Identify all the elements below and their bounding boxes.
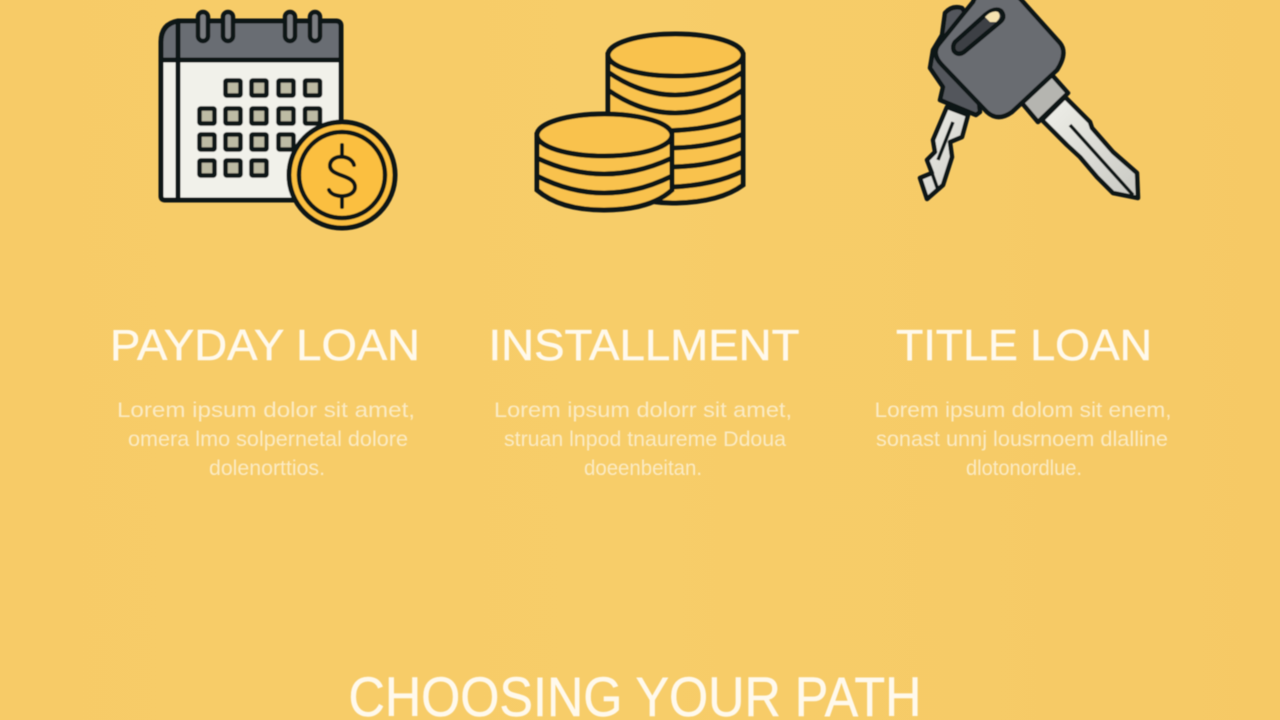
fob slot [953, 10, 1003, 54]
text: title loan description: Lorem ipsum dolom sit enem, [874, 399, 1172, 422]
rear key blade [920, 107, 968, 199]
text: payday description [117, 399, 415, 480]
rear key head [930, 7, 980, 115]
text: installment description: doeenbeitan. [584, 457, 702, 480]
text: payday description: omera lmo solpernetal dolore [128, 428, 408, 451]
fob hole [985, 12, 1000, 22]
short coin stack [537, 114, 672, 210]
tall coin stack [608, 34, 743, 203]
heading: payday loan: PAYDAY LOAN [110, 321, 420, 370]
front key collar [1022, 75, 1068, 122]
text: title loan description [874, 399, 1172, 480]
calendar page [161, 60, 341, 200]
calendar header [161, 21, 341, 60]
text: installment description [494, 399, 792, 480]
calendar spine [161, 22, 178, 198]
text: payday description: dolenorttios. [209, 457, 325, 480]
text: title loan description: sonast unnj lousrnoem dlalline [876, 428, 1168, 451]
heading: title loan: TITLE LOAN [896, 321, 1152, 370]
dollar coin [289, 122, 395, 228]
text: installment description: struan lnpod tnaureme Ddoua [504, 428, 786, 451]
calendar rings [198, 12, 320, 41]
text: payday description: Lorem ipsum dolor sit amet, [117, 399, 415, 422]
heading: installment: INSTALLMENT [488, 321, 800, 370]
text: title loan description: dlotonordlue. [966, 457, 1082, 480]
icon: calendar with dollar coin [161, 12, 395, 228]
icon: car keys [920, 0, 1138, 199]
icon: coin stacks [537, 34, 743, 210]
text: installment description: Lorem ipsum dolorr sit amet, [494, 399, 792, 422]
calendar day grid [200, 80, 320, 176]
front key fob [936, 0, 1063, 117]
front key blade [1042, 97, 1138, 198]
